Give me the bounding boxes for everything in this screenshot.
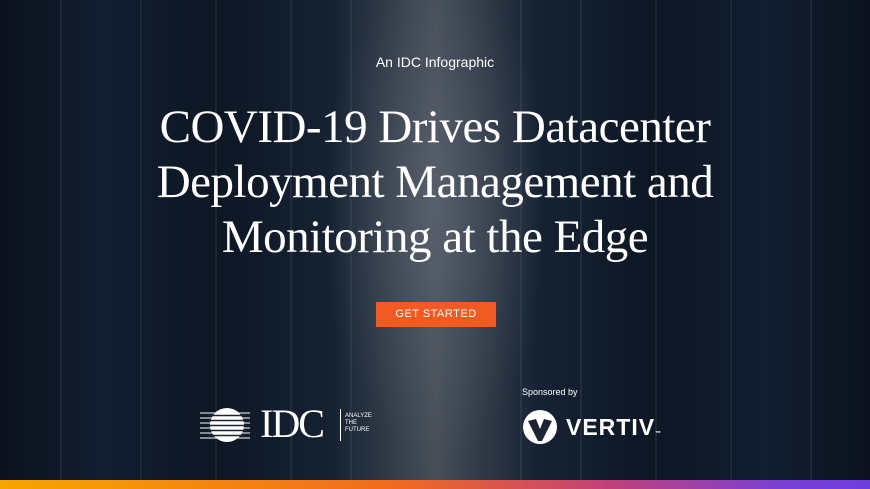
button: get started: GET STARTED [395, 308, 477, 320]
subtitle: An IDC Infographic [376, 54, 494, 70]
logo: IDC: ANALYZE [345, 413, 372, 419]
title: Deployment Management and [157, 156, 713, 208]
sponsored by: Sponsored by [522, 387, 578, 397]
button: get started [376, 302, 496, 327]
title: Monitoring at the Edge [222, 211, 648, 263]
logo: IDC: THE [345, 420, 357, 426]
logo: IDC: FUTURE [345, 427, 369, 433]
gradient bar [0, 480, 870, 489]
title [157, 101, 714, 263]
logo: IDC: IDC [260, 401, 323, 446]
logo: Vertiv: VERTIV™ [566, 414, 662, 440]
logo: IDC [200, 401, 372, 446]
title: COVID-19 Drives Datacenter [160, 101, 710, 153]
logo: Vertiv [523, 410, 662, 444]
